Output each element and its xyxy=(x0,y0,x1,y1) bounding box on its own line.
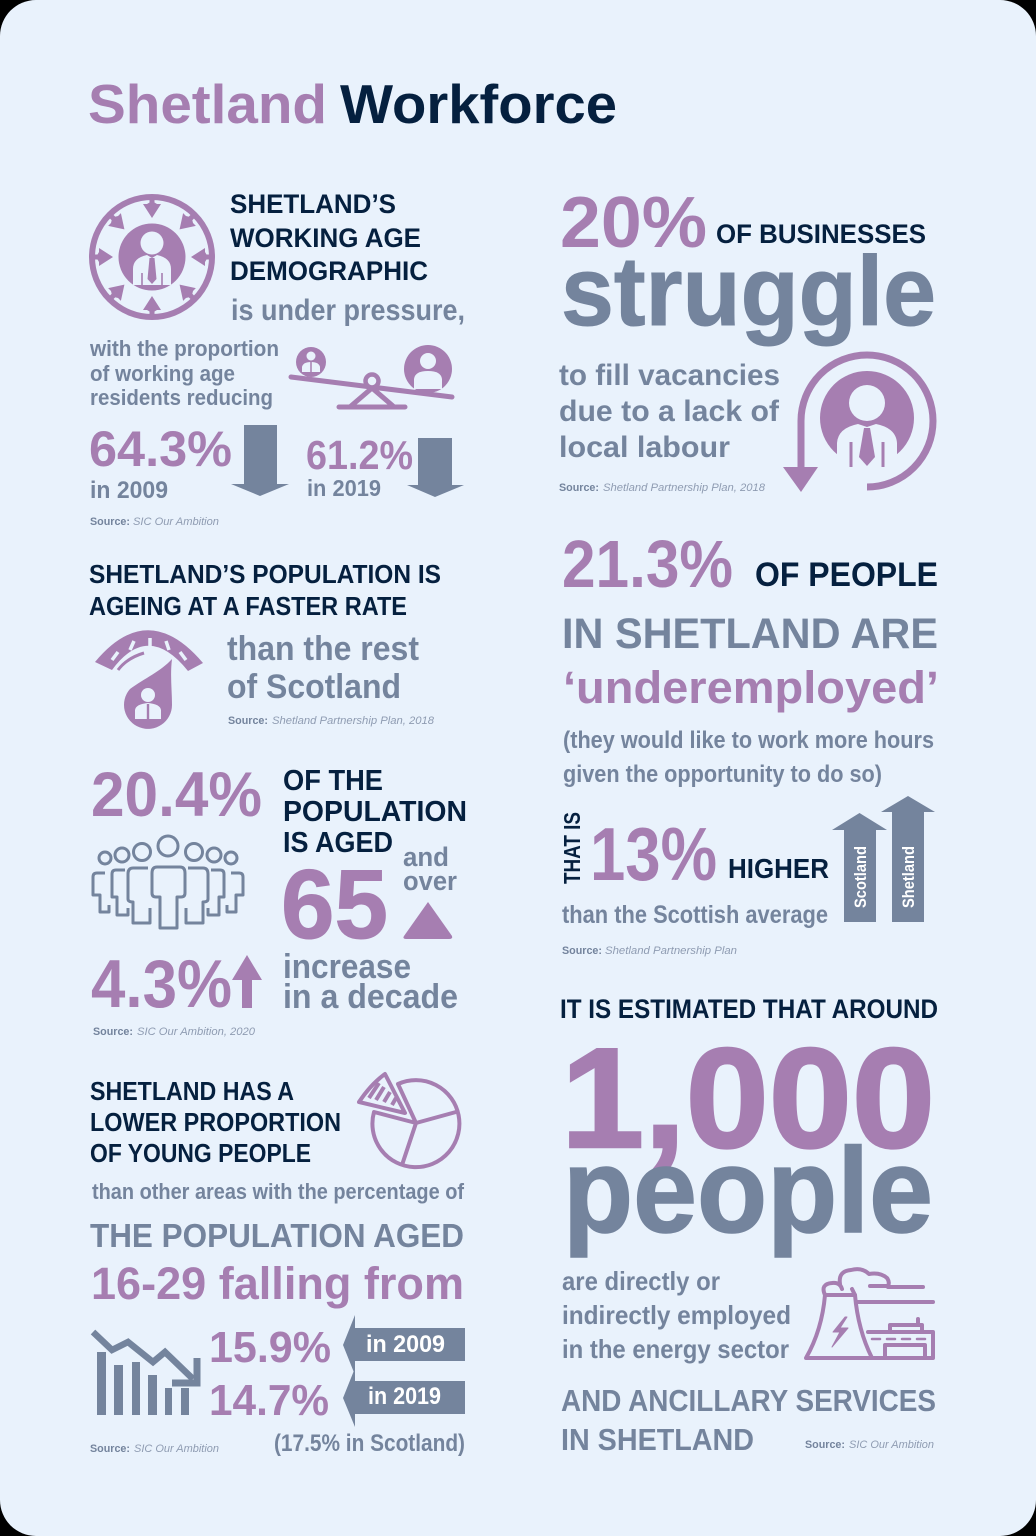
text: underemployed: ‘underemployed’ xyxy=(563,662,939,713)
source: Source: xyxy=(90,1443,130,1455)
stat: 15.9% in 2009: in 2009 xyxy=(366,1331,445,1358)
source: Source: xyxy=(93,1026,133,1038)
stat: 64.3% in 2009: in 2009 xyxy=(90,477,168,504)
source: SIC Our Ambition, 2020 xyxy=(137,1026,256,1038)
heading: ageing faster: AGEING AT A FASTER RATE xyxy=(89,591,407,621)
heading: ageing faster: SHETLAND’S POPULATION IS xyxy=(89,559,441,589)
heading: of the population is aged xyxy=(283,765,467,859)
text: than the rest of Scotland: of Scotland xyxy=(227,668,401,706)
stat: 61.2% in 2019: 61.2% xyxy=(306,432,413,478)
text: 17.5% in Scotland: (17.5% in Scotland) xyxy=(274,1430,465,1457)
source xyxy=(90,516,219,528)
heading: ageing faster xyxy=(89,559,441,621)
stat: 65 and over xyxy=(281,842,457,959)
heading: 21.3% of people: OF PEOPLE xyxy=(755,556,938,594)
text: than the Scottish average: than the Scottish average xyxy=(562,901,828,929)
source: SIC Our Ambition xyxy=(849,1439,934,1451)
heading: 20% of businesses struggle: OF BUSINESSES xyxy=(716,219,926,249)
source: Source: xyxy=(90,516,130,528)
stat: 15.9% in 2009: 15.9% xyxy=(209,1323,331,1372)
text: proportion reducing xyxy=(89,336,279,410)
stat: 1,000: 1,000 xyxy=(561,1019,935,1178)
text: than the rest of Scotland: than the rest xyxy=(227,630,419,668)
icon: group of people xyxy=(93,836,243,928)
heading: 20% of businesses struggle: struggle xyxy=(561,236,936,346)
stat: 4.3% increase: in a decade xyxy=(283,978,458,1016)
heading: lower proportion of young people xyxy=(90,1076,341,1168)
text: than other areas: than other areas with the percentage of xyxy=(92,1179,465,1204)
icon: person with circular arrow xyxy=(783,355,933,492)
arrow: down 2019 xyxy=(407,438,464,497)
source: Source: xyxy=(228,715,268,727)
heading: working age demographic xyxy=(230,189,465,327)
text: to fill vacancies: to fill vacancies xyxy=(559,359,780,392)
source: Shetland Partnership Plan, 2018 xyxy=(272,715,435,727)
panel: working age demographic xyxy=(89,189,465,528)
text: proportion reducing: with the proportion xyxy=(89,336,279,361)
heading: of the population is aged: IS AGED xyxy=(283,827,393,859)
arrows: Scotland and Shetland xyxy=(832,796,935,922)
stat: 61.2% in 2019: in 2019 xyxy=(307,475,381,501)
arrows: Scotland and Shetland: Scotland xyxy=(851,846,870,908)
stat: 14.7% in 2019: 14.7% xyxy=(209,1376,329,1425)
stat: that is 13% higher: 13% xyxy=(590,812,717,896)
icon: gauge xyxy=(95,630,203,729)
heading: of the population is aged: OF THE xyxy=(283,765,383,797)
text: the population aged: THE POPULATION AGED xyxy=(90,1217,464,1254)
source: SIC Our Ambition xyxy=(134,1443,219,1455)
icon: pie chart xyxy=(359,1074,459,1167)
source: SIC Our Ambition xyxy=(133,516,219,528)
title: Workforce xyxy=(340,73,617,135)
stat: 65 and over: 65 xyxy=(281,849,388,959)
stat: that is 13% higher xyxy=(559,812,829,896)
icon: seesaw xyxy=(291,345,452,407)
text: explanation: given the opportunity to do so) xyxy=(563,761,882,788)
title xyxy=(88,73,617,135)
text: proportion reducing: of working age xyxy=(90,361,235,386)
icon: falling bar chart xyxy=(93,1332,197,1415)
stat: that is 13% higher: HIGHER xyxy=(728,853,829,884)
text: to fill vacancies: due to a lack of xyxy=(559,395,780,428)
text: explanation xyxy=(563,727,934,788)
panel: underemployed xyxy=(559,527,939,957)
heading: lower proportion of young people: LOWER PROPORTION xyxy=(90,1107,341,1137)
text: 16-29 falling from: 16-29 falling from xyxy=(91,1258,464,1309)
heading: of the population is aged: POPULATION xyxy=(283,796,467,828)
heading: lower proportion of young people: SHETLAND HAS A xyxy=(90,1076,294,1106)
panel: ageing population xyxy=(89,559,441,729)
text: ancillary services: IN SHETLAND xyxy=(561,1422,754,1457)
stat: that is 13% higher: THAT IS xyxy=(559,812,585,884)
panel: young people xyxy=(90,1074,465,1457)
source: Source: xyxy=(562,945,602,957)
text: directly or indirectly employed xyxy=(562,1266,791,1364)
panel: aged 65 and over xyxy=(91,760,467,1038)
heading: working age demographic: SHETLAND’S xyxy=(230,189,396,219)
stat: 15.9% in 2009 xyxy=(209,1315,465,1375)
heading: working age demographic: WORKING AGE xyxy=(230,223,421,253)
heading: 20% of businesses struggle xyxy=(560,183,936,346)
stat: 4.3% increase xyxy=(91,946,458,1022)
arrows: Scotland and Shetland: Shetland xyxy=(899,846,918,908)
stat: 4.3% increase: 4.3% xyxy=(91,946,232,1022)
text: to fill vacancies: local labour xyxy=(559,431,730,464)
arrow: down 2009 xyxy=(231,425,289,496)
stat: 4.3% increase: increase xyxy=(283,948,411,986)
heading: 20% of businesses struggle: 20% xyxy=(560,183,707,263)
heading: 21.3% of people xyxy=(562,527,938,602)
icon: person under pressure xyxy=(92,197,212,317)
source: Source: xyxy=(559,482,599,494)
stat: 14.7% in 2019: in 2019 xyxy=(368,1383,441,1410)
title: Shetland xyxy=(88,73,327,135)
heading: 21.3% of people: 21.3% xyxy=(562,527,733,602)
text: ancillary services xyxy=(561,1383,936,1457)
stat: 14.7% in 2019 xyxy=(209,1368,465,1427)
text: ancillary services: AND ANCILLARY SERVICES xyxy=(561,1383,936,1418)
heading: working age demographic: is under pressure, xyxy=(231,294,465,327)
source xyxy=(805,1439,934,1451)
stat: 65 and over: over xyxy=(403,866,457,896)
stat: 64.3% in 2009: 64.3% xyxy=(89,421,232,477)
text: people: people xyxy=(563,1122,933,1258)
stat: 61.2% in 2019 xyxy=(306,432,413,501)
panel: energy sector xyxy=(560,994,938,1457)
text: in Shetland are: IN SHETLAND ARE xyxy=(562,610,938,658)
text: explanation: (they would like to work more hours xyxy=(563,727,934,754)
source: Shetland Partnership Plan, 2018 xyxy=(603,482,766,494)
text: than the rest of Scotland xyxy=(227,630,419,706)
text: proportion reducing: residents reducing xyxy=(90,385,273,410)
icon: power station xyxy=(806,1269,933,1358)
text: directly or indirectly employed: are directly or xyxy=(562,1266,720,1296)
stat: 64.3% in 2009 xyxy=(89,421,232,504)
source: Shetland Partnership Plan xyxy=(605,945,737,957)
source: Source: xyxy=(805,1439,845,1451)
source xyxy=(90,1443,219,1455)
text: directly or indirectly employed: indirectly employed xyxy=(562,1300,791,1330)
stat: 20.4%: 20.4% xyxy=(91,760,262,830)
heading: estimated: IT IS ESTIMATED THAT AROUND xyxy=(560,994,938,1024)
heading: lower proportion of young people: OF YOUNG PEOPLE xyxy=(90,1138,311,1168)
text: directly or indirectly employed: in the energy sector xyxy=(562,1334,789,1364)
panel: businesses struggle xyxy=(559,183,936,494)
stat: 65 and over: and xyxy=(403,842,449,872)
text: to fill vacancies xyxy=(559,359,780,464)
heading: working age demographic: DEMOGRAPHIC xyxy=(230,256,428,286)
